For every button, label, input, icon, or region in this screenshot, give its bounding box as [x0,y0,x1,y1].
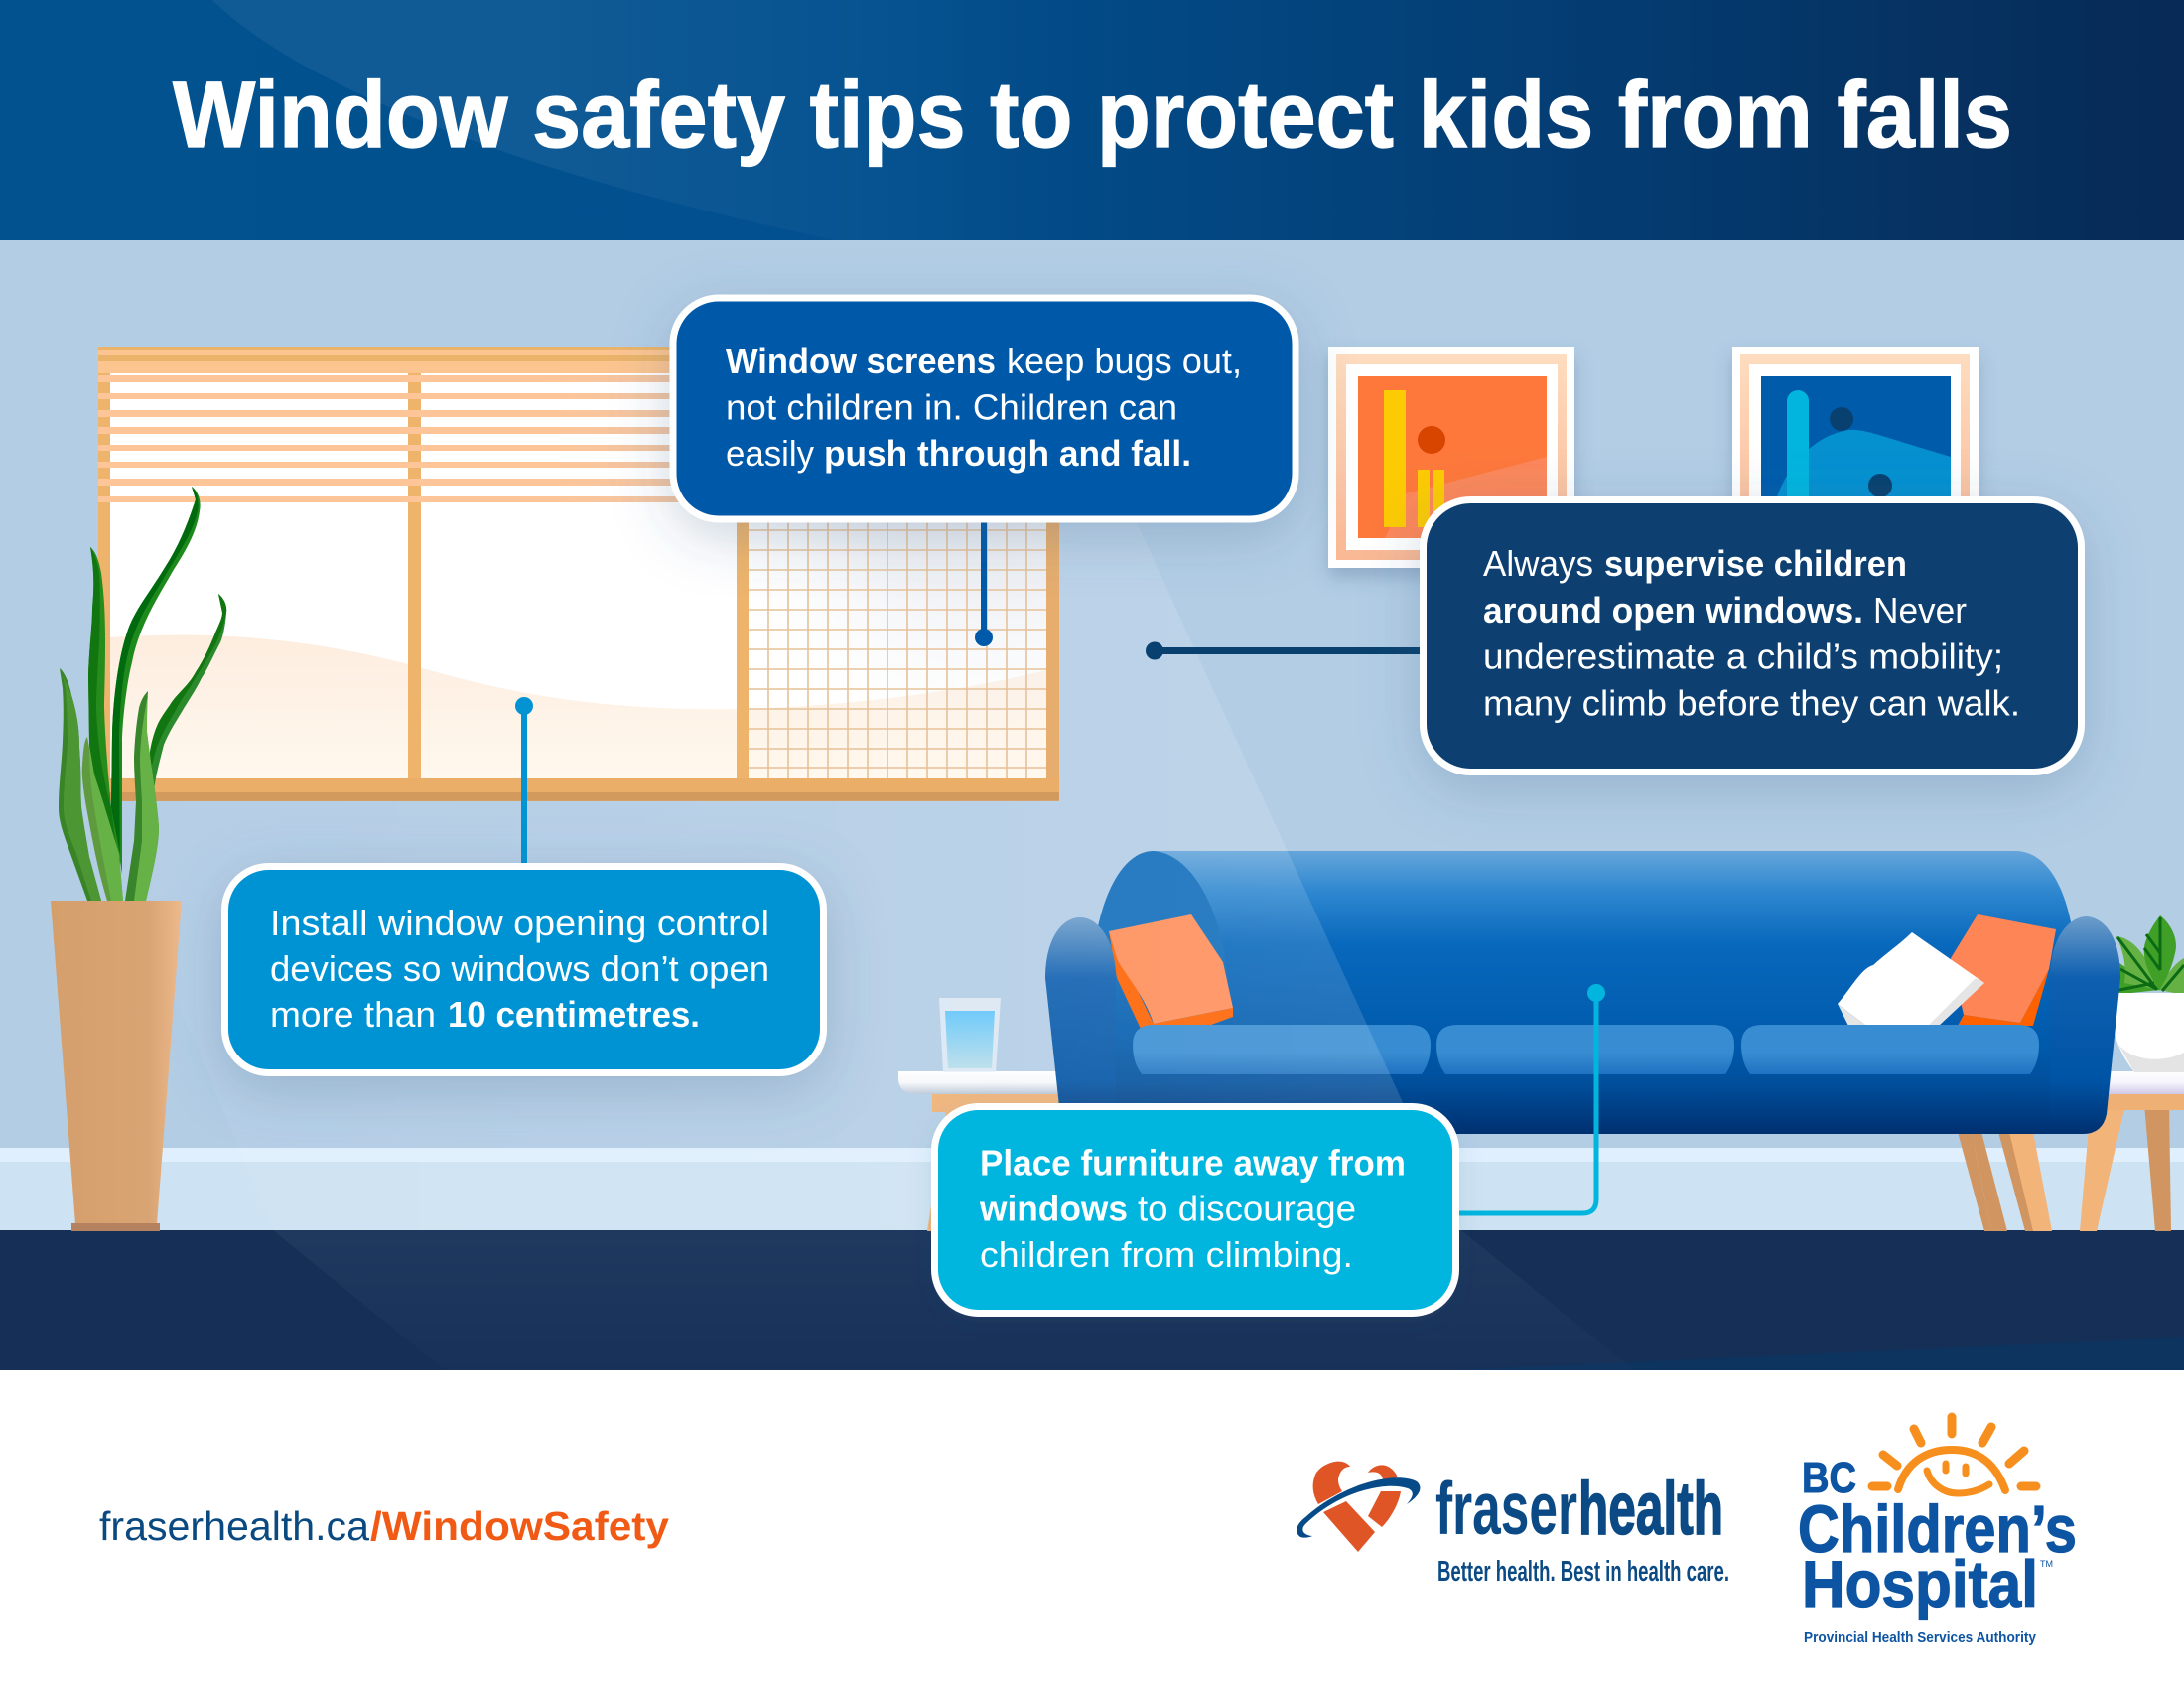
callout: window screens: keep bugs out, [1007,341,1242,381]
website URL [99,1503,669,1549]
connector line: supervise [1146,641,1423,659]
wordmark: Hospital: Hospital [1802,1547,2038,1620]
callout: window screens: easily [726,433,814,474]
floor [0,1230,2184,1370]
icon: heart with swoosh [1297,1462,1420,1552]
connector line: window opening control [515,697,533,865]
connector line: furniture [1457,984,1605,1213]
pillow: white [1838,932,1984,1026]
callout: place furniture away: windows [979,1188,1128,1229]
callout: supervise children: underestimate a child’s mobility; [1483,635,2003,677]
sofa left bump [1091,851,1229,1033]
light beam on floor [273,1230,1634,1370]
side table: right [2080,1071,2184,1231]
callout: place furniture away: Place furniture away from [980,1142,1406,1184]
callout: window opening control devices: Install window opening control [270,903,769,943]
plant pot [51,901,182,1231]
side table: left [898,1071,1067,1231]
potted plant: right [2113,915,2184,1072]
trademark: TM [2040,1559,2053,1569]
callout: window screens: not children in. Children can [726,387,1177,427]
pillow: left orange [1109,914,1233,1029]
left dark blade [88,547,122,866]
callout: window screens: push through and fall. [824,433,1191,474]
BC Children's Hospital logo [1798,1417,2077,1646]
sofa [1045,851,2120,1134]
curved right blade [150,594,226,791]
title: Window safety tips to protect kids from falls [173,63,2012,168]
callout: supervise children [1424,500,2081,773]
sofa arm: right [2050,916,2120,1134]
sofa legs [1958,1132,2052,1231]
callout: window screens: Window screens [726,341,996,381]
right light blade [125,691,159,901]
wordmark: Children's: Children’s [1798,1492,2077,1567]
glass of water [939,998,1001,1072]
potted plant: left [51,487,226,1231]
Fraser Health logo [1297,1462,1729,1588]
short light blade [82,737,123,901]
pillow: right orange [1951,914,2056,1026]
callout: supervise children: supervise children [1604,543,1907,584]
tall blade [111,487,201,874]
window frame [98,347,1059,779]
window pane [98,347,1059,779]
callout: window opening control devices: devices so windows don’t open [270,948,769,989]
callout: window screens [673,298,1296,519]
framed picture: orange [1328,347,1574,568]
wordmark: BC: BC [1802,1454,1856,1502]
wordmark: fraser: fraser [1435,1467,1577,1550]
connector line: window screens [975,516,993,646]
framed picture: blue [1732,347,1979,568]
callout: window opening control devices: more than [270,994,436,1035]
window blinds [98,347,793,502]
header banner [0,0,2184,240]
window [98,347,1059,801]
callout: supervise children: Never [1873,590,1967,631]
callout: supervise children: many climb before they can walk. [1483,683,2020,723]
callout: window opening control devices: 10 centimetres. [448,994,700,1035]
window screen mesh [749,496,1046,778]
light beam on wall and sofa [93,377,1461,1230]
callout: place furniture away: to discourage [1138,1188,1356,1229]
sofa arm: left [1045,917,1116,1134]
endorsement line: Provincial Health Services Authority [1804,1629,2037,1646]
window sill [98,778,1059,801]
sofa seat cushions [1133,1025,2039,1074]
wordmark: health: health [1578,1467,1723,1550]
wall background [0,240,2184,1149]
callout: place furniture away: children from climbing. [980,1234,1353,1275]
baseboard [0,1148,2184,1231]
view of hills through window [110,635,1046,778]
website URL: fraserhealth.ca [99,1503,369,1549]
icon: smiling sun [1872,1417,2036,1493]
sofa back [1091,851,2077,1134]
callout: place furniture away [935,1106,1455,1313]
website URL: /WindowSafety [370,1503,669,1549]
tagline: Better health. Best in health care. [1437,1556,1729,1588]
left mid-green blade [59,668,101,901]
callout: supervise children: Always [1483,543,1593,584]
callout: supervise children: around open windows. [1483,590,1863,631]
window shading near callout [421,347,1046,778]
callout: window opening control devices [224,866,824,1072]
